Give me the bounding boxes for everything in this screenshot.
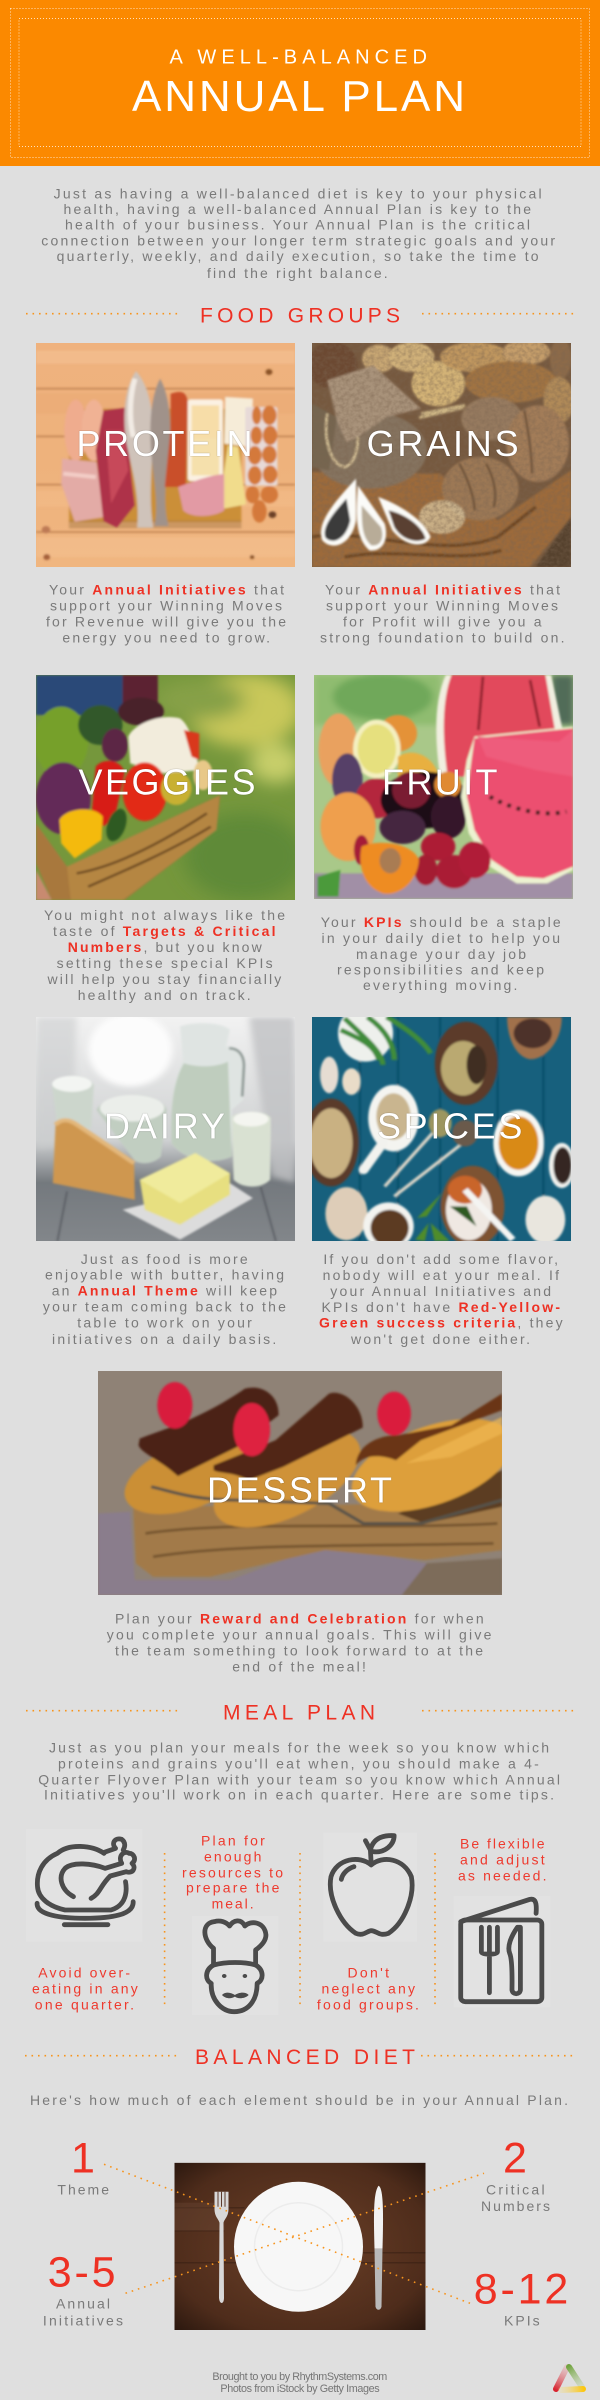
description: dessert: you complete your annual goals. This will give xyxy=(107,1626,492,1642)
tip text: plan for enough resources: resources to xyxy=(182,1864,283,1880)
description: fruit xyxy=(321,914,561,993)
tip: be flexible xyxy=(454,1836,550,2007)
fork xyxy=(214,2192,228,2303)
tip text: be flexible: Be flexible xyxy=(460,1836,545,1852)
description: dairy: Just as food is more xyxy=(81,1251,248,1267)
logo: Rhythm Systems triangle xyxy=(556,2367,583,2390)
tip text: avoid over-eating xyxy=(32,1964,138,2012)
tip: plan for enough resources xyxy=(182,1832,283,2015)
connector lines over plate xyxy=(104,2164,484,2303)
photo label: dessert: DESSERT xyxy=(207,1470,392,1511)
stat label: annual initiatives: Initiatives xyxy=(43,2312,123,2328)
tip text: don't neglect food groups: neglect any xyxy=(322,1980,415,1996)
photo: dairy products xyxy=(36,1017,295,1241)
stat: 2 critical numbers xyxy=(481,2134,550,2214)
description: dairy: your team coming back to the xyxy=(43,1298,286,1314)
description: spices: If you don't add some flavor, xyxy=(323,1251,558,1267)
tip text: avoid over-eating: one quarter. xyxy=(35,1996,134,2012)
stat label: KPIs: KPIs xyxy=(504,2312,540,2328)
stat label: annual initiatives xyxy=(43,2296,123,2328)
description: protein xyxy=(46,581,286,646)
description: veggies: healthy and on track. xyxy=(78,987,251,1003)
tip text: don't neglect food groups xyxy=(317,1964,419,2012)
description: spices: Green success criteria, they xyxy=(319,1314,563,1330)
photo: bowls of spices xyxy=(312,1017,571,1241)
tip text: plan for enough resources: meal. xyxy=(212,1896,254,1912)
description: grains: strong foundation to build on. xyxy=(320,630,564,646)
heading: food groups: FOOD GROUPS xyxy=(200,304,400,327)
photo label: grains: GRAINS xyxy=(367,423,519,464)
description: veggies: will help you stay financially xyxy=(46,971,281,987)
tip: don't neglect food groups xyxy=(317,1833,419,2012)
tip text: plan for enough resources xyxy=(182,1832,283,1912)
panel: dessert xyxy=(98,1371,529,1674)
description: grains xyxy=(320,581,564,646)
intro text block: connection between your longer term strategic goals and your xyxy=(41,232,555,248)
description: veggies xyxy=(44,907,285,1003)
description: dessert xyxy=(107,1610,492,1674)
description: dairy: an Annual Theme will keep xyxy=(52,1282,277,1298)
intro text block: find the right balance. xyxy=(207,265,388,281)
description: grains: Your Annual Initiatives that xyxy=(325,581,560,597)
meal plan text block: Quarter Flyover Plan with your team so you know which Annual xyxy=(38,1771,560,1787)
photo label: spices: SPICES xyxy=(377,1105,522,1146)
tip text: be flexible: as needed. xyxy=(458,1868,546,1884)
heading: meal plan: MEAL PLAN xyxy=(223,1701,375,1724)
tip text: plan for enough resources: enough xyxy=(204,1848,261,1864)
balanced diet intro text: Here's how much of each element should be in your Annual Plan. xyxy=(30,2092,568,2108)
stat label: critical numbers: Numbers xyxy=(481,2198,550,2214)
panel: spices xyxy=(304,1005,575,1347)
intro text block xyxy=(41,185,555,281)
tip text: avoid over-eating: eating in any xyxy=(32,1980,138,1996)
stat: 8-12 KPIs: 8-12 xyxy=(474,2265,568,2313)
description: fruit: in your daily diet to help you xyxy=(322,930,560,946)
description: dairy: initiatives on a daily basis. xyxy=(52,1331,276,1347)
icon: roast turkey xyxy=(26,1829,142,1942)
panel: fruit xyxy=(314,673,574,993)
description: protein: support your Winning Moves xyxy=(50,598,282,614)
meal plan text block xyxy=(38,1739,560,1802)
tip text: don't neglect food groups: food groups. xyxy=(317,1996,419,2012)
footer credits: Photos from iStock by Getty Images xyxy=(220,2383,380,2395)
photo: protein foods on wood xyxy=(36,343,295,567)
stat label: critical numbers xyxy=(481,2181,550,2214)
meal plan text block: proteins and grains you'll eat when, you should make a 4- xyxy=(58,1755,539,1771)
description: spices: your Annual Initiatives and xyxy=(330,1283,551,1299)
photo: chocolate eclairs xyxy=(98,1371,502,1595)
panel: grains xyxy=(307,339,574,646)
tip text: be flexible: and adjust xyxy=(460,1852,545,1868)
stat: 3-5 annual initiatives: 3-5 xyxy=(48,2249,116,2297)
photo label: veggies: VEGGIES xyxy=(78,761,256,802)
stat label: critical numbers: Critical xyxy=(486,2181,545,2197)
knife xyxy=(374,2186,383,2310)
description: spices: nobody will eat your meal. If xyxy=(323,1267,559,1283)
photo: place setting xyxy=(174,2163,426,2330)
tip text: avoid over-eating: Avoid over- xyxy=(38,1964,130,1980)
photo: crate of vegetables xyxy=(36,675,295,900)
description: veggies: Numbers, but you know xyxy=(68,939,263,955)
description: spices: won't get done either. xyxy=(350,1331,530,1347)
meal plan text block: Just as you plan your meals for the week so you know which xyxy=(49,1739,549,1755)
stat: 2 critical numbers: 2 xyxy=(503,2134,527,2182)
tip text: plan for enough resources: Plan for xyxy=(201,1832,265,1848)
plate xyxy=(234,2182,363,2312)
icon: menu xyxy=(454,1896,550,2007)
intro text block: Just as having a well-balanced diet is key to your physical xyxy=(54,185,542,201)
description: fruit: everything moving. xyxy=(363,977,517,993)
stat: 1 theme: 1 xyxy=(71,2134,95,2182)
tip text: plan for enough resources: prepare the xyxy=(186,1880,280,1896)
tip dividers xyxy=(165,1853,435,2008)
photo: fruit and watermelon xyxy=(314,675,573,899)
heading: balanced diet: BALANCED DIET xyxy=(195,2046,415,2069)
title: main: ANNUAL PLAN xyxy=(132,72,465,121)
stat label: theme: Theme xyxy=(57,2181,109,2197)
description: dessert: Plan your Reward and Celebration for when xyxy=(115,1610,484,1626)
description: fruit: manage your day job xyxy=(356,946,526,962)
description: dairy xyxy=(43,1251,286,1347)
intro text block: health of your business. Your Annual Plan is the critical xyxy=(65,216,530,232)
tip text: be flexible xyxy=(458,1836,546,1884)
description: dairy: table to work on your xyxy=(77,1314,252,1330)
title: kicker: A WELL-BALANCED xyxy=(170,46,427,68)
tip text: don't neglect food groups: Don't xyxy=(348,1964,389,1980)
photo: grains and bread xyxy=(312,343,571,567)
header banner xyxy=(0,0,600,166)
meal plan text block: Initiatives you'll work on in each quarter. Here are some tips. xyxy=(44,1786,554,1802)
description: dessert: the team something to look forward to at the xyxy=(115,1642,483,1658)
photo label: protein: PROTEIN xyxy=(76,423,252,464)
description: spices xyxy=(319,1251,563,1347)
stat label: annual initiatives: Annual xyxy=(56,2296,110,2312)
photo label: dairy: DAIRY xyxy=(104,1105,225,1146)
description: veggies: You might not always like the xyxy=(44,907,285,923)
icon: apple xyxy=(323,1833,417,1942)
description: dessert: end of the meal! xyxy=(232,1658,366,1674)
description: grains: for Profit will give you a xyxy=(343,614,542,630)
footer credits: Brought to you by RhythmSystems.com xyxy=(212,2371,387,2383)
panel: dairy xyxy=(36,1013,295,1347)
panel: protein xyxy=(36,343,295,646)
description: fruit: Your KPIs should be a staple xyxy=(321,914,561,930)
icon: chef xyxy=(192,1916,279,2015)
stat: 3-5 annual initiatives xyxy=(43,2249,123,2328)
description: grains: support your Winning Moves xyxy=(326,598,558,614)
photo label: fruit: FRUIT xyxy=(382,761,498,802)
description: protein: Your Annual Initiatives that xyxy=(49,581,284,597)
description: spices: KPIs don't have Red-Yellow- xyxy=(322,1299,560,1315)
description: dairy: enjoyable with butter, having xyxy=(45,1266,284,1282)
intro text block: health, having a well-balanced Annual Plan is key to the xyxy=(64,201,531,217)
description: protein: energy you need to grow. xyxy=(62,630,270,646)
description: veggies: setting these special KPIs xyxy=(57,955,273,971)
description: veggies: taste of Targets & Critical xyxy=(53,923,276,939)
panel: veggies xyxy=(34,673,306,1003)
tip: avoid over-eating xyxy=(26,1829,142,2012)
description: fruit: responsibilities and keep xyxy=(337,962,544,978)
intro text block: quarterly, weekly, and daily execution, so take the time to xyxy=(57,248,539,264)
footer credits xyxy=(212,2371,387,2395)
stat: 1 theme xyxy=(57,2134,109,2197)
description: protein: for Revenue will give you the xyxy=(46,614,286,630)
